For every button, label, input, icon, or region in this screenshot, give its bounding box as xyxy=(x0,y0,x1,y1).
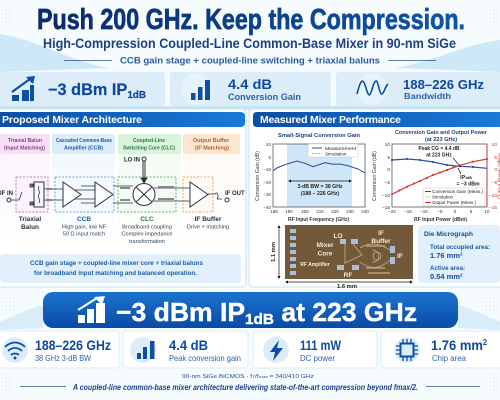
icon: bars xyxy=(191,80,210,100)
label: CCB column: Amplifier (CCB) xyxy=(64,146,103,152)
chart: conversion gain and output power: 5 xyxy=(470,209,473,214)
die labels: RF xyxy=(344,272,352,279)
stat card: bandwidth: 188–226 GHz xyxy=(35,337,111,353)
die labels: LO xyxy=(333,233,343,240)
caption: CLC xyxy=(122,216,172,245)
die micrograph card: 0.54 mm xyxy=(430,272,460,281)
stat card: chip area xyxy=(381,331,500,368)
die labels: RF Amplifier xyxy=(300,262,330,268)
die micrograph xyxy=(271,225,413,290)
KPI card: IP1dB: 1dB xyxy=(127,90,146,101)
chart: small-signal conversion gain: Conversion Gain (dB) xyxy=(255,151,261,201)
chart: small-signal conversion gain: RF Input Frequency (GHz) xyxy=(288,217,349,223)
stat card: bandwidth: 38 GHz 3-dB BW xyxy=(35,353,91,363)
label: output buffer column: Output Buffer xyxy=(193,138,229,144)
die labels: Mixer xyxy=(317,242,334,249)
caption: CCB xyxy=(62,216,107,238)
heading: architecture: Proposed Mixer Architecture xyxy=(2,114,142,126)
port labels: IF IN xyxy=(0,191,13,197)
stat card: DC power: DC power xyxy=(300,353,335,363)
caption: CCB: High gain, low NF xyxy=(62,224,107,230)
annotation: peak CG: Peak CG = 4.4 dB xyxy=(418,146,460,152)
stat card: chip area: 1.76 mm xyxy=(431,337,487,353)
caption: CLC: CLC xyxy=(140,216,154,223)
caption: IF buffer xyxy=(187,216,229,230)
caption: triaxial balun: Triaxial xyxy=(19,216,41,223)
callout: architecture summary xyxy=(0,254,241,283)
chart: small-signal conversion gain: 240 xyxy=(361,209,369,214)
legend: Measurement xyxy=(325,146,357,151)
chart: small-signal conversion gain: 0 xyxy=(268,155,271,160)
legend xyxy=(423,188,485,206)
hero banner: −3 dBm IP xyxy=(116,297,242,327)
chart: small-signal conversion gain: 188 xyxy=(270,209,278,214)
footnote: process: 90-nm SiGe BiCMOS · f T/fmax = 340/410 GHz xyxy=(182,374,314,380)
icon: rising bars xyxy=(78,296,105,323)
chart: conversion gain and output power xyxy=(372,130,500,223)
annotation: peak CG xyxy=(418,146,460,165)
KPI card: bandwidth: 188–226 GHz xyxy=(403,77,484,92)
die labels: IF xyxy=(397,253,403,260)
chart: small-signal conversion gain: −10 xyxy=(263,167,271,172)
simulation curve xyxy=(273,161,365,173)
caption: CLC: transformation xyxy=(129,239,165,245)
caption: CCB: 50 Ω input match xyxy=(63,232,105,238)
icon: amplifier 3 xyxy=(190,182,208,207)
stat card: bandwidth xyxy=(0,331,119,368)
chart: conversion gain and output power: −20 xyxy=(388,209,396,214)
annotation: bandwidth: 3-dB BW = 38 GHz xyxy=(297,184,343,190)
KPI card: IP1dB xyxy=(0,72,165,106)
die micrograph card: 2 xyxy=(460,272,463,278)
hero banner xyxy=(43,292,458,328)
chart: conversion gain and output power: −5 xyxy=(492,180,497,186)
annotation: bandwidth: (188 – 226 GHz) xyxy=(301,191,339,197)
closing statement: A coupled-line common-base mixer architecture delivering state-of-the-art compression beyond fmax/2. xyxy=(72,383,418,392)
chart: small-signal conversion gain xyxy=(255,133,369,223)
gain curve xyxy=(392,159,487,168)
chart: conversion gain and output power: 10 xyxy=(492,142,497,148)
die labels xyxy=(300,230,403,279)
icon: chip xyxy=(394,337,420,363)
icon: mixer xyxy=(133,184,155,206)
chart: small-signal conversion gain: 210 xyxy=(316,209,324,214)
chart: conversion gain and output power: Conversion Gain and Output Power xyxy=(395,130,488,136)
stat card: peak gain: 4.4 dB xyxy=(169,337,208,353)
power curve xyxy=(392,159,487,194)
dimension: height: 1.1 mm xyxy=(271,242,277,262)
circuit diagram xyxy=(7,157,229,212)
caption: CLC: Broadband coupling xyxy=(122,224,172,230)
dimension: width: 1.6 mm xyxy=(337,284,357,290)
chart: conversion gain and output power: 10 xyxy=(484,209,490,214)
label: triaxial balun column xyxy=(0,134,50,154)
panel: proposed mixer architecture xyxy=(0,109,246,287)
stat card: chip area: Chip area xyxy=(432,353,466,363)
hero banner: at 223 GHz xyxy=(274,297,417,327)
icon: triaxial balun xyxy=(30,182,44,207)
hero banner: 1dB xyxy=(245,311,274,328)
chart: small-signal conversion gain: 200 xyxy=(301,209,309,214)
caption: CLC: Complex impedance xyxy=(122,232,172,238)
stat card: peak gain xyxy=(123,331,248,368)
icon: IF in port xyxy=(7,198,11,202)
measurement curve xyxy=(273,161,365,173)
panel: measured mixer performance xyxy=(249,109,500,290)
label: CLC column: Coupled-Line xyxy=(133,138,165,144)
legend: Simulation xyxy=(432,194,454,200)
heading: architecture xyxy=(0,112,245,127)
caption: triaxial balun xyxy=(19,216,41,231)
chart: conversion gain and output power: 5 xyxy=(387,155,390,161)
chart: conversion gain and output power: RF Input Power (dBm) xyxy=(414,217,467,223)
label: CLC column xyxy=(118,134,181,154)
chart: conversion gain and output power: −10 xyxy=(382,193,390,199)
legend: Output Power (Meas.) xyxy=(432,200,477,205)
chart: conversion gain and output power: −15 xyxy=(404,209,412,214)
chart: conversion gain and output power: −5 xyxy=(437,209,443,214)
label: CCB column: Cascaded Common-Base xyxy=(56,138,112,144)
column tints xyxy=(0,134,240,244)
chart: conversion gain and output power: −15 xyxy=(489,205,497,211)
caption: triaxial balun: Balun xyxy=(21,224,39,231)
chart: small-signal conversion gain: Small-Signal Conversion Gain xyxy=(278,133,361,139)
port labels: LO IN xyxy=(124,158,140,164)
label: output buffer column xyxy=(183,134,240,154)
KPI card: IP1dB: −3 dBm IP xyxy=(48,81,128,99)
caption: CCB: CCB xyxy=(77,216,91,223)
chart: conversion gain and output power: 0 xyxy=(494,167,497,173)
icon: lightning bolt xyxy=(263,337,289,363)
subtitle: High-Compression Coupled-Line Common-Base Mixer in 90-nm SiGe xyxy=(43,36,456,51)
die micrograph card: 1.76 mm xyxy=(430,251,460,260)
chart: small-signal conversion gain: −20 xyxy=(263,180,271,185)
label: triaxial balun column: Triaxial Balun xyxy=(8,138,42,144)
icon: LO port xyxy=(141,157,147,183)
callout: architecture summary: for broadband input matching and balanced operation. xyxy=(34,270,197,277)
port labels: IF OUT xyxy=(225,191,245,197)
chart: small-signal conversion gain: −40 xyxy=(263,205,271,210)
die micrograph card: Total occupied area: xyxy=(430,244,490,251)
chart: small-signal conversion gain: 230 xyxy=(346,209,354,214)
chart: conversion gain and output power: −15 xyxy=(382,205,390,211)
label: triaxial balun column: (Input Matching) xyxy=(4,146,45,152)
label: CCB column xyxy=(52,134,115,154)
icon: wifi xyxy=(2,337,28,363)
chart: conversion gain and output power: 0 xyxy=(387,167,390,173)
stat card: DC power: 111 mW xyxy=(300,337,342,353)
caption: IF buffer: Drive + matching xyxy=(187,224,229,230)
chart: small-signal conversion gain: 220 xyxy=(331,209,339,214)
icon: bars xyxy=(130,337,156,363)
icon: rising bars xyxy=(12,76,35,101)
annotation: bandwidth xyxy=(288,180,352,197)
annotation: IP1dB xyxy=(456,168,480,188)
KPI card: bandwidth: Bandwidth xyxy=(404,91,451,101)
icon: wave xyxy=(357,81,388,95)
dimension: width xyxy=(285,280,413,290)
die micrograph card: 2 xyxy=(460,252,463,256)
legend: Simulation xyxy=(325,152,347,156)
KPI card: conversion gain: 4.4 dB xyxy=(228,76,272,92)
legend xyxy=(308,144,358,157)
markers xyxy=(391,158,488,195)
metal traces xyxy=(345,243,390,273)
KPI card: bandwidth xyxy=(336,72,500,106)
heading: performance xyxy=(253,112,500,127)
heading: performance: Measured Mixer Performance xyxy=(260,114,401,126)
KPI card: conversion gain xyxy=(170,72,331,106)
chart: conversion gain and output power: 0 xyxy=(454,209,457,214)
annotation: IP1dB: = −3 dBm xyxy=(456,182,480,188)
legend: Conversion Gain (Meas.) xyxy=(432,189,483,194)
annotation: peak CG: at 223 GHz xyxy=(426,152,452,158)
caption: IF buffer: IF Buffer xyxy=(195,216,222,223)
chart: conversion gain and output power: 10 xyxy=(385,142,390,148)
chart: conversion gain and output power: 5 xyxy=(494,155,497,161)
annotation: IP1dB: IP1dB xyxy=(460,175,472,181)
bond pads xyxy=(290,229,395,275)
chart: conversion gain and output power: −10 xyxy=(489,193,497,199)
chart: small-signal conversion gain: 190 xyxy=(285,209,293,214)
chart: small-signal conversion gain: 10 xyxy=(266,142,271,147)
stat card: DC power xyxy=(253,331,377,368)
die micrograph card: Active area: xyxy=(430,265,465,272)
chart: conversion gain and output power: (at 223 GHz) xyxy=(425,137,457,143)
die labels: IF xyxy=(378,230,384,237)
icon: amplifier 1 xyxy=(63,182,81,207)
die micrograph card: Die Micrograph xyxy=(424,231,473,238)
icon: amplifier 2 xyxy=(95,182,113,207)
tagline: CCB gain stage + coupled-line switching + triaxial baluns xyxy=(120,56,380,66)
die labels: Core xyxy=(318,250,333,258)
label: output buffer column: (IF Matching) xyxy=(195,146,229,152)
stat card: chip area: 2 xyxy=(483,338,488,347)
die micrograph card xyxy=(418,225,500,283)
callout: architecture summary: CCB gain stage + coupled-line mixer core + triaxial baluns xyxy=(30,260,203,267)
dimension: height xyxy=(271,225,280,279)
chart: conversion gain and output power: −5 xyxy=(385,180,390,186)
stat card: peak gain: Peak conversion gain xyxy=(169,353,241,363)
die labels: Buffer xyxy=(371,238,391,245)
chart: conversion gain and output power: Conversion Gain (dB) xyxy=(372,151,378,201)
chart: conversion gain and output power: −10 xyxy=(420,209,428,214)
port labels xyxy=(0,158,245,197)
label: CLC column: Switching Core (CLC) xyxy=(123,146,175,152)
chart: small-signal conversion gain: −30 xyxy=(263,192,271,197)
KPI card: conversion gain: Conversion Gain xyxy=(228,92,301,103)
